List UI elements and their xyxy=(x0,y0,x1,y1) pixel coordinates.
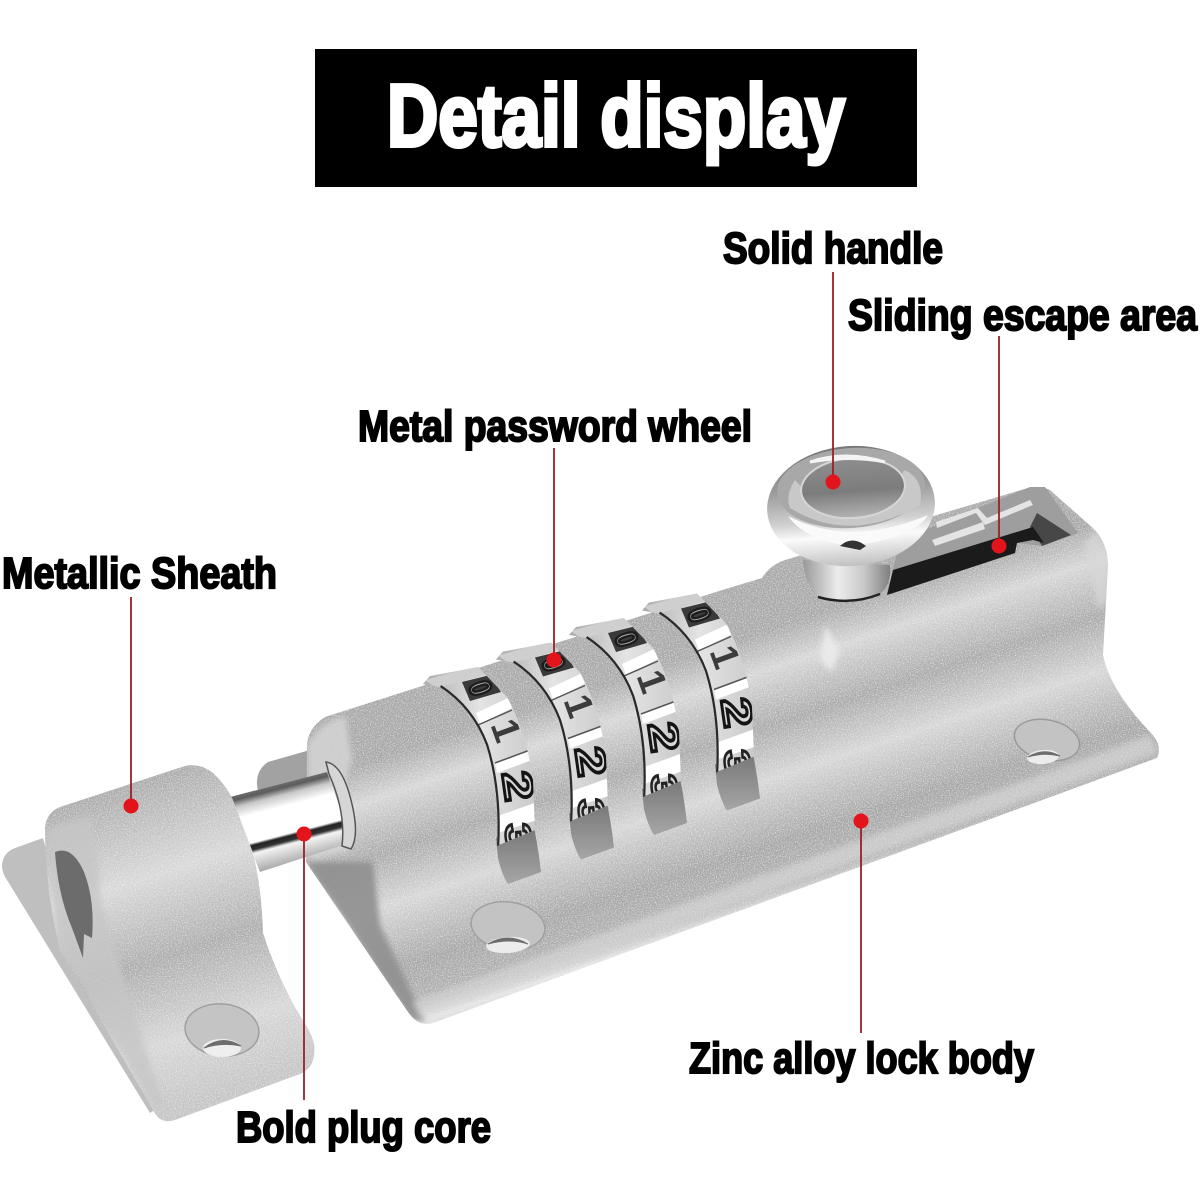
mounting holes xyxy=(468,714,1083,955)
wheel 1: 0 xyxy=(462,676,499,700)
wheel 2: 2 xyxy=(566,744,615,779)
pin collar ring xyxy=(326,762,356,849)
callout: metal password wheel: Metal password wheel xyxy=(358,402,752,451)
sheath bore xyxy=(55,851,93,958)
wheel 2: 3 xyxy=(570,797,613,826)
wheel 4: 2 xyxy=(712,695,761,730)
callout: bold plug core: Bold plug core xyxy=(236,1103,491,1152)
wheel 1: 1 xyxy=(482,714,528,748)
sheath mounting hole xyxy=(182,1000,262,1060)
callout: zinc alloy lock body: Zinc alloy lock body xyxy=(689,1034,1034,1083)
wheel 3: 0 xyxy=(608,627,645,651)
sliding knob handle xyxy=(763,440,939,602)
wheel 3: 1 xyxy=(628,665,674,699)
callout: sliding escape area xyxy=(848,291,1197,554)
lock body xyxy=(306,487,1159,1024)
plug pin xyxy=(230,772,352,872)
wheel 1: 2 xyxy=(493,768,542,804)
callout: zinc alloy lock body xyxy=(689,814,1034,1083)
callout: metallic sheath: Metallic Sheath xyxy=(2,549,277,598)
wheel 2: 0 xyxy=(535,652,572,675)
metallic sheath xyxy=(2,765,315,1121)
callout: metal password wheel xyxy=(358,402,752,668)
wheel 3: 3 xyxy=(643,772,686,802)
wheel 4: 1 xyxy=(701,640,747,674)
wheel 4: 3 xyxy=(716,748,759,777)
wheel 4 xyxy=(639,586,761,810)
title banner: Detail display xyxy=(387,66,845,165)
back tab behind pin xyxy=(257,750,330,815)
wheel 4: 0 xyxy=(681,603,718,626)
wheel 3: 2 xyxy=(639,719,688,755)
wheel 1: 3 xyxy=(497,821,540,851)
callout: solid handle: Solid handle xyxy=(723,224,943,273)
title banner xyxy=(315,49,917,187)
callout: solid handle xyxy=(723,224,943,490)
callout: bold plug core xyxy=(236,826,491,1152)
wheel 3 xyxy=(566,611,688,835)
sliding slot xyxy=(887,487,1078,595)
wheel 2 xyxy=(493,636,615,860)
wheel 2: 1 xyxy=(555,689,601,723)
callout: metallic sheath xyxy=(2,549,277,814)
wheel 1 xyxy=(420,660,542,884)
lock illustration xyxy=(2,440,1159,1121)
